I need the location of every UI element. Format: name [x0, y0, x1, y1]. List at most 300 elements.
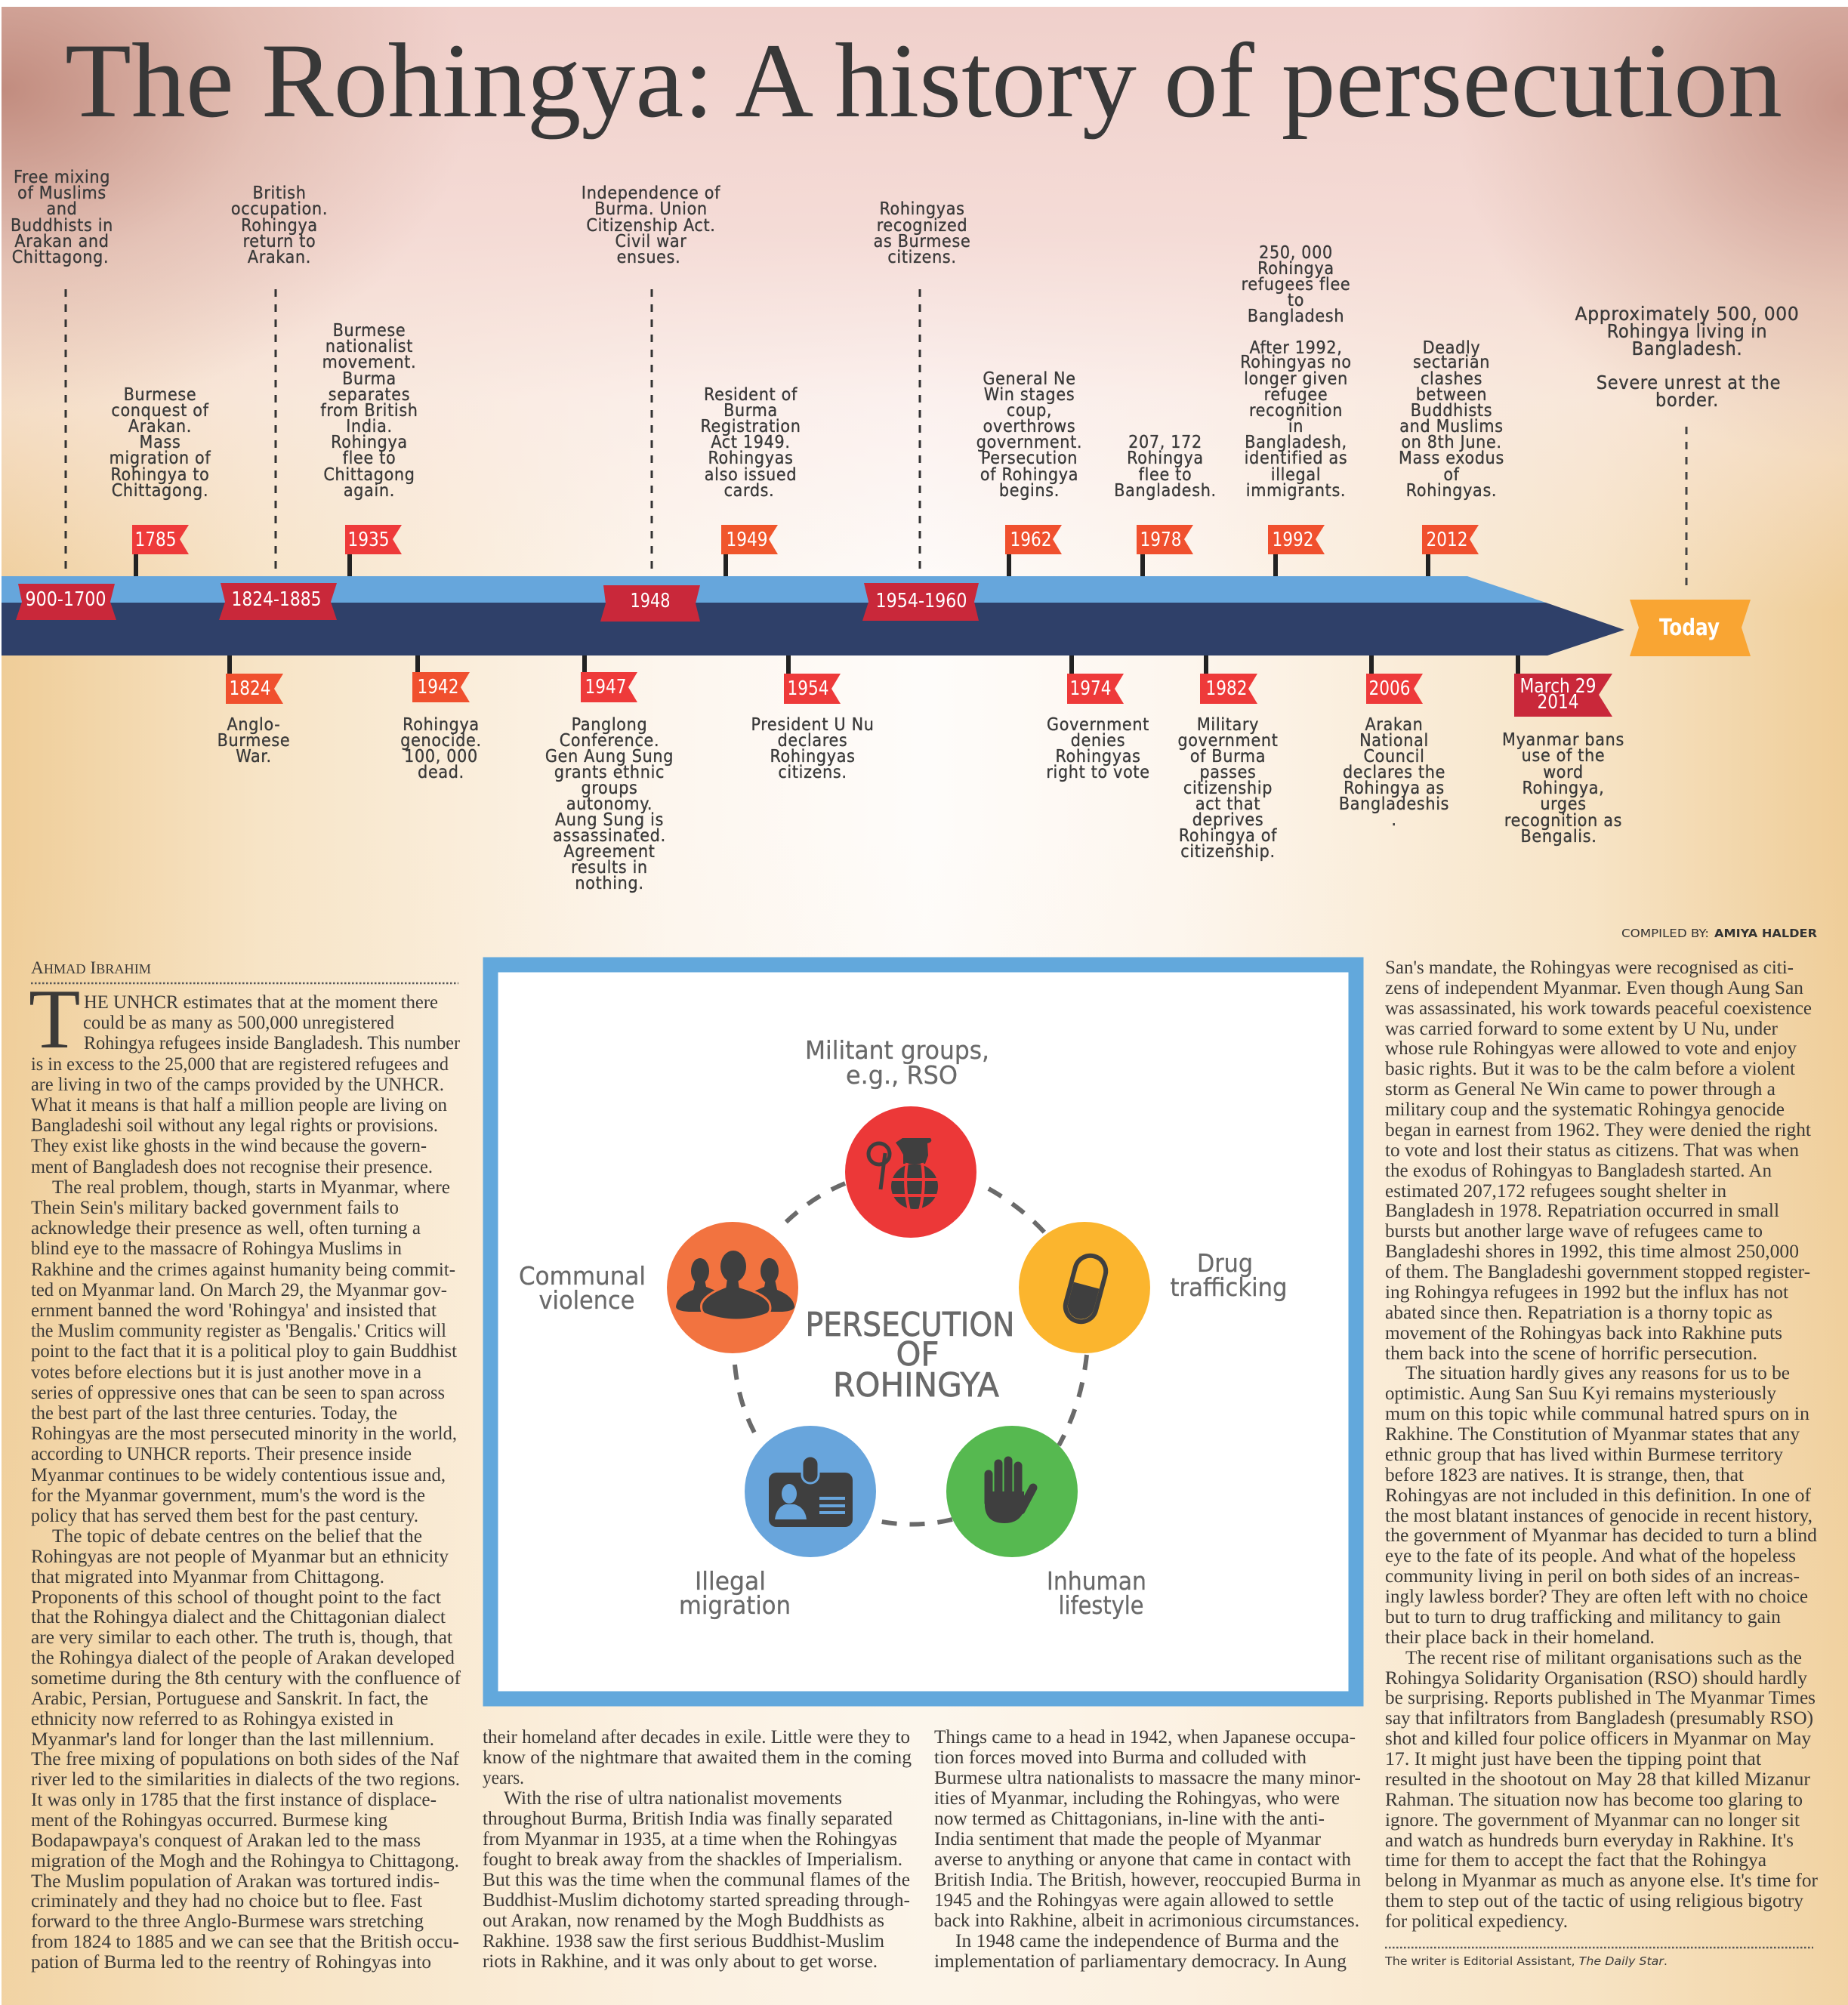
- diagram labels: trafficking: [1171, 1272, 1287, 1302]
- flag: 1992: Rohingyas no: [1240, 353, 1352, 372]
- flag: 1992: recognition: [1249, 401, 1343, 421]
- diagram labels: Militant groups,: [805, 1035, 989, 1065]
- credit: compiled by: AMIYA HALDER: [1714, 927, 1817, 940]
- flag: 1935: separates: [329, 385, 410, 405]
- credit: compiled by: COMPILED BY:: [1621, 927, 1709, 940]
- flag: 2012: 2012: [1426, 529, 1468, 551]
- article column 1: criminately and they had no choice but to flee. Fast: [31, 1891, 422, 1911]
- article column 1: Bangladeshi soil without any legal rights or provisions.: [31, 1115, 438, 1136]
- flag: 2006: [1339, 655, 1449, 830]
- article column 1: It was only in 1785 that the first instance of displace-: [31, 1790, 437, 1810]
- flag: 1935: Burma: [342, 369, 396, 389]
- timeline era: 900-1700: Arakan and: [14, 232, 110, 251]
- article column 1: Arabic, Persian, Portuguese and Sanskrit. In fact, the: [31, 1689, 428, 1709]
- flag: 1974: Government: [1047, 715, 1149, 735]
- flag: 1962: begins.: [999, 481, 1060, 501]
- article column 1: series of oppressive ones that can be seen to span across: [31, 1383, 445, 1403]
- flag: 1949: 1949: [727, 529, 767, 551]
- article column 1: Myanmar's land for longer than the last millennium.: [31, 1729, 434, 1750]
- flag: 1974: Rohingyas: [1055, 747, 1141, 767]
- flag: 1949: Act 1949.: [711, 433, 791, 452]
- flag: March 29 2014: 2014: [1538, 691, 1578, 714]
- icon: people: [667, 1222, 798, 1353]
- flag: 1962: Persecution: [981, 449, 1078, 468]
- flag: 1824: Burmese: [218, 731, 290, 751]
- flag: 1947: nothing.: [575, 874, 644, 893]
- timeline era: 1948: Independence of: [582, 184, 720, 203]
- article column 4: bursts but another large wave of refugees came to: [1385, 1221, 1763, 1242]
- flag: 1978: 1978: [1140, 529, 1181, 551]
- diagram labels: e.g., RSO: [846, 1060, 958, 1090]
- diagram labels: Inhuman: [1047, 1566, 1146, 1596]
- article column 4: their place back in their homeland.: [1385, 1627, 1655, 1648]
- article column 1: ernment banned the word 'Rohingya' and insisted that: [31, 1300, 437, 1321]
- timeline bar arrow: [2, 576, 1624, 655]
- article column 4: to vote and lost their status as citizens. That was when: [1385, 1140, 1799, 1161]
- article column 4: ingly lawless border? They are often left with no choice: [1385, 1587, 1808, 1607]
- article column 4: ing Rohingya refugees in 1992 but the influx has not: [1385, 1282, 1788, 1303]
- article column 1: Thein Sein's military backed government fails to: [31, 1198, 399, 1218]
- drop cap: T: [29, 973, 80, 1066]
- flag: 1935: from British: [320, 401, 418, 421]
- flag: 1982: citizenship.: [1180, 842, 1276, 862]
- flag: 2006: 2006: [1368, 677, 1411, 700]
- article column 4: ethnic group that has lived within Burmese territory: [1385, 1445, 1783, 1465]
- article column 4: zens of independent Myanmar. Even though Aung San: [1385, 978, 1804, 998]
- flag: 1785: Mass: [140, 433, 180, 452]
- article column 1: Rohingyas are not people of Myanmar but an ethnicity: [31, 1547, 449, 1567]
- flag: 2012: Deadly: [1423, 338, 1480, 358]
- article column 1: the Muslim community register as 'Bengalis.' Critics will: [31, 1321, 446, 1341]
- flag: 1942: dead.: [418, 763, 464, 782]
- article column 2: [483, 1727, 912, 1972]
- timeline era: 900-1700: of Muslims: [17, 184, 106, 203]
- article column 4: was carried forward to some extent by U Nu, under: [1385, 1019, 1779, 1039]
- flag: 1982: act that: [1195, 794, 1260, 814]
- flag: 1982: Rohingya of: [1179, 826, 1277, 846]
- timeline era: 1954-1960: recognized: [877, 216, 967, 236]
- flag: 1954: citizens.: [778, 763, 847, 782]
- flag: 1942: Rohingya: [403, 715, 480, 735]
- flag: March 29 2014: urges: [1540, 794, 1587, 814]
- flag: 2006: Bangladeshis: [1339, 794, 1449, 814]
- article column 4: San's mandate, the Rohingyas were recognised as citi-: [1385, 958, 1794, 978]
- flag: 2012: Rohingyas.: [1406, 481, 1497, 501]
- flag: 1785: migration of: [110, 449, 211, 468]
- flag: 1785: [110, 385, 211, 576]
- flag: 1947: results in: [571, 858, 648, 878]
- flag: 1824: 1824: [230, 677, 270, 700]
- article column 4: but to turn to drug trafficking and militancy to gain: [1385, 1607, 1782, 1627]
- article column 4: abated since then. Repatriation is a thorny topic as: [1385, 1303, 1772, 1323]
- diagram labels: [519, 1035, 1287, 1620]
- article column 4: ignore. The government of Myanmar can no longer sit: [1385, 1810, 1800, 1831]
- flag: 2012: sectarian: [1413, 353, 1490, 372]
- flag: 2006: National: [1359, 731, 1429, 751]
- flag: 1954: 1954: [787, 677, 829, 700]
- flag: March 29 2014: [1502, 655, 1624, 847]
- article column 1: Proponents of this school of thought point to the fact: [31, 1587, 441, 1608]
- article column 4: the most blatant instances of genocide in recent history,: [1385, 1506, 1813, 1526]
- article column 4: 17. It might just have been the tipping point that: [1385, 1749, 1761, 1769]
- timeline era: 1948: ensues.: [617, 248, 680, 267]
- diagram labels: lifestyle: [1059, 1590, 1143, 1620]
- flag: 1982: deprives: [1192, 810, 1263, 830]
- flag: 1962: overthrows: [983, 417, 1075, 436]
- today marker: Bangladesh.: [1632, 338, 1742, 359]
- flag: 2012: Buddhists: [1411, 401, 1492, 421]
- article column 1: pation of Burma led to the reentry of Rohingyas into: [31, 1952, 431, 1973]
- article column 3: ities of Myanmar, including the Rohingyas, who were: [934, 1788, 1340, 1809]
- flag: March 29 2014: recognition as: [1504, 811, 1622, 831]
- article column 1: Rakhine and the crimes against humanity being commit-: [31, 1260, 455, 1280]
- flag: 1962: [976, 369, 1082, 576]
- article column 4: The situation hardly gives any reasons for us to be: [1405, 1363, 1790, 1383]
- flag: 1785: Rohingya to: [110, 465, 210, 485]
- diagram centre heading: ROHINGYA: [833, 1366, 999, 1405]
- diagram labels: Drug: [1197, 1248, 1253, 1278]
- panel: persecution diagram: [491, 965, 1356, 1699]
- article column 2: years.: [483, 1768, 524, 1788]
- flag: 1949: [700, 385, 801, 576]
- flag: 1962: coup,: [1007, 401, 1052, 421]
- flag: 1974: right to vote: [1046, 763, 1150, 782]
- flag: 1942: [400, 655, 482, 782]
- article column 1: The real problem, though, starts in Myanmar, where: [52, 1177, 450, 1198]
- flag: 1978: flee to: [1139, 465, 1192, 485]
- flag: 1935: India.: [346, 417, 393, 436]
- flag: 1947: groups: [581, 779, 638, 798]
- article column 1: HE UNHCR estimates that at the moment there: [84, 992, 438, 1013]
- article column 4: belong in Myanmar as much as anyone else. It's time for: [1385, 1871, 1819, 1891]
- flag: 1949: cards.: [724, 481, 774, 501]
- article column 2: With the rise of ultra nationalist movements: [504, 1788, 842, 1809]
- flag: 1942: 100, 000: [404, 747, 478, 767]
- flag: 2012: [1399, 338, 1504, 576]
- article column 4: began in earnest from 1962. They were denied the right: [1385, 1120, 1811, 1140]
- article column 4: Bangladesh in 1978. Repatriation occurred in small: [1385, 1201, 1779, 1221]
- flag: 1962: Win stages: [984, 385, 1075, 405]
- diagram centre heading: OF: [896, 1335, 939, 1374]
- article column 4: and watch as hundreds burn everyday in Rakhine. It's: [1385, 1831, 1794, 1851]
- flag: 1935: Chittagong: [323, 465, 415, 485]
- article column 4: storm as General Ne Win came to power through a: [1385, 1079, 1775, 1100]
- article column 3: averse to anything or anyone that came in contact with: [934, 1849, 1351, 1870]
- timeline era: 900-1700: [11, 168, 116, 620]
- diagram labels: Illegal: [695, 1566, 766, 1596]
- flag: 1785: Chittagong.: [112, 481, 208, 501]
- flag: 1982: [1177, 655, 1279, 862]
- article column 4: Rahman. The situation now has become too glaring to: [1385, 1790, 1803, 1810]
- article column 3: [934, 1727, 1361, 1972]
- article column 2: from Myanmar in 1935, at a time when the Rohingyas: [483, 1829, 897, 1849]
- timeline era: 900-1700: and: [46, 199, 78, 219]
- article column 1: the best part of the last three centuries. Today, the: [31, 1403, 397, 1424]
- article column 1: They exist like ghosts in the wind because the govern-: [31, 1136, 427, 1156]
- article column 1: from 1824 to 1885 and we can see that the British occu-: [31, 1932, 459, 1952]
- article column 1: are living in two of the camps provided by the UNHCR.: [31, 1075, 444, 1095]
- flag: 1974: denies: [1071, 731, 1125, 751]
- flag: 1992: refugees flee: [1242, 275, 1350, 295]
- timeline era: 1824-1885: Arakan.: [248, 248, 311, 267]
- flag: 2012: between: [1416, 385, 1487, 405]
- today marker: Severe unrest at the: [1597, 372, 1781, 393]
- article column 3: tion forces moved into Burma and colluded with: [934, 1747, 1307, 1768]
- flag: 1982: passes: [1199, 763, 1257, 782]
- flag: 1949: Resident of: [704, 385, 798, 405]
- flag: 1982: 1982: [1205, 677, 1248, 700]
- flag: 1978: Bangladesh.: [1114, 481, 1217, 501]
- flag: 1954: Rohingyas: [770, 747, 856, 767]
- article column 1: that migrated into Myanmar from Chittagong.: [31, 1567, 384, 1587]
- icon: grenade: [845, 1106, 976, 1238]
- flag: 1947: [545, 655, 674, 893]
- article column 4: community living in peril on both sides of an increas-: [1385, 1566, 1800, 1587]
- flag: 1935: flee to: [343, 449, 396, 468]
- article column 1: acknowledge their presence as well, often turning a: [31, 1218, 421, 1238]
- flag: 2006: Arakan: [1365, 715, 1423, 735]
- article column 4: military coup and the systematic Rohingya genocide: [1385, 1100, 1785, 1120]
- timeline era: 1824-1885: return to: [243, 232, 316, 251]
- article column 1: migration of the Mogh and the Rohingya to Chittagong.: [31, 1851, 459, 1871]
- flag: 2006: .: [1391, 810, 1397, 830]
- article column 2: But this was the time when the communal flames of the: [483, 1870, 910, 1890]
- article column 1: point to the fact that it is a political ploy to gain Buddhist: [31, 1341, 457, 1362]
- flag: 1947: Panglong: [572, 715, 647, 735]
- article column 4: Rakhine. The Constitution of Myanmar states that any: [1385, 1424, 1800, 1445]
- flag: 1992: immigrants.: [1246, 481, 1346, 501]
- flag: 1947: Aung Sung is: [555, 810, 664, 830]
- article column 4: whose rule Rohingyas were allowed to vote and enjoy: [1385, 1038, 1797, 1059]
- flag: 1935: Rohingya: [331, 433, 408, 452]
- article column 2: know of the nightmare that awaited them in the coming: [483, 1747, 912, 1768]
- article column 1: What it means is that half a million people are living on: [31, 1095, 447, 1115]
- flag: 2012: and Muslims: [1399, 417, 1504, 436]
- article column 4: them back into the scene of horrific persecution.: [1385, 1343, 1757, 1364]
- article column 4: optimistic. Aung San Suu Kyi remains mysteriously: [1385, 1383, 1776, 1404]
- article column 4: the exodus of Rohingyas to Bangladesh started. An: [1385, 1161, 1772, 1181]
- article column 1: river led to the similarities in dialects of the two regions.: [31, 1769, 460, 1790]
- timeline era: 1824-1885: 1824-1885: [231, 588, 322, 611]
- flag: 1935: again.: [344, 481, 395, 501]
- article column 1: The free mixing of populations on both sides of the Naf: [31, 1749, 460, 1769]
- article column 4: shot and killed four police officers in Myanmar on May: [1385, 1729, 1812, 1749]
- title: The Rohingya: A history of persecution: [65, 22, 1782, 140]
- article column 1: Rohingya refugees inside Bangladesh. This number: [84, 1033, 461, 1053]
- flag: 1974: 1974: [1069, 677, 1112, 700]
- article column 3: 1945 and the Rohingyas were again allowed to settle: [934, 1890, 1334, 1911]
- flag: 2012: clashes: [1421, 369, 1482, 389]
- byline: AHMAD IBRAHIM: [31, 958, 151, 977]
- flag: 1982: government: [1177, 731, 1279, 751]
- flag: 1954: declares: [778, 731, 847, 751]
- flag: 1992: longer given: [1244, 369, 1348, 389]
- flag: 1978: Rohingya: [1127, 449, 1204, 468]
- article column 1: Myanmar continues to be widely contentious issue and,: [31, 1465, 446, 1485]
- today marker: Approximately 500, 000: [1575, 303, 1799, 325]
- flag: 1942: genocide.: [400, 731, 482, 751]
- flag: 1992: in: [1288, 417, 1303, 436]
- flag: 1962: of Rohingya: [980, 465, 1078, 485]
- article column 1: blind eye to the massacre of Rohingya Muslims in: [31, 1238, 402, 1259]
- article column 3: Things came to a head in 1942, when Japanese occupa-: [934, 1727, 1356, 1747]
- flag: 1947: autonomy.: [566, 794, 653, 814]
- flag: 1992: Rohingya: [1257, 259, 1334, 279]
- flag: 1992: illegal: [1271, 465, 1321, 485]
- flag: 2006: declares the: [1343, 763, 1445, 782]
- article column 4: eye to the fate of its people. And what of the hopeless: [1385, 1546, 1796, 1566]
- timeline era: 1954-1960: Rohingyas: [879, 199, 965, 219]
- icon: id card: [745, 1426, 876, 1557]
- article column 1: [29, 973, 461, 1973]
- flag: 1954: [751, 655, 875, 782]
- timeline era: 1948: Burma. Union: [594, 199, 708, 219]
- flag: 1949: also issued: [705, 465, 797, 485]
- timeline era: 900-1700: Buddhists in: [11, 216, 113, 236]
- flag: March 29 2014: use of the: [1522, 746, 1605, 766]
- article column 4: time for them to accept the fact that the Rohingya: [1385, 1850, 1766, 1871]
- flag: 1947: Conference.: [560, 731, 659, 751]
- flag: 1992: [1240, 243, 1352, 576]
- flag: 1947: 1947: [585, 676, 627, 699]
- flag: 1978: 207, 172: [1128, 433, 1202, 452]
- timeline era: 1824-1885: occupation.: [231, 199, 328, 219]
- timeline era: 900-1700: 900-1700: [26, 588, 106, 611]
- timeline era: 1954-1960: [862, 199, 979, 621]
- flag: 1962: government.: [976, 433, 1082, 452]
- article column 2: Buddhist-Muslim dichotomy started spreading through-: [483, 1890, 910, 1911]
- today marker: border.: [1655, 389, 1719, 411]
- flag: March 29 2014: Bengalis.: [1520, 827, 1597, 847]
- flag: 1949: Rohingyas: [708, 449, 794, 468]
- today marker: Today: [1659, 615, 1720, 641]
- flag: 1978: [1114, 433, 1217, 576]
- article column 1: votes before elections but it is just another move in a: [31, 1362, 421, 1383]
- article column 4: [1385, 958, 1819, 1932]
- flag: 1954: President U Nu: [751, 715, 875, 735]
- diagram centre heading: [805, 1306, 1015, 1405]
- article column 2: throughout Burma, British India was finally separated: [483, 1809, 893, 1829]
- article column 4: resulted in the shootout on May 28 that killed Mizanur: [1385, 1769, 1811, 1790]
- flag: March 29 2014: Rohingya,: [1523, 779, 1604, 798]
- flag: 1824: Anglo-: [227, 715, 280, 735]
- flag: 1785: Arakan.: [128, 417, 192, 436]
- article column 1: could be as many as 500,000 unregistered: [83, 1013, 394, 1033]
- flag: 1824: [218, 655, 290, 767]
- flag: 1992: identified as: [1245, 449, 1347, 468]
- credit: compiled by: [1621, 927, 1817, 940]
- flag: March 29 2014: word: [1543, 763, 1584, 782]
- article column 1: sometime during the 8th century with the confluence of: [31, 1668, 461, 1689]
- article column 4: of them. The Bangladeshi government stopped register-: [1385, 1262, 1810, 1282]
- article column 4: Rohingya Solidarity Organisation (RSO) should hardly: [1385, 1668, 1807, 1689]
- article column 4: estimated 207,172 refugees sought shelter in: [1385, 1181, 1726, 1201]
- diagram labels: Communal: [519, 1261, 646, 1291]
- timeline era: 1824-1885: Rohingya: [241, 216, 318, 236]
- article column 3: now termed as Chittagonians, in-line with the anti-: [934, 1809, 1325, 1829]
- flag: 1935: 1935: [347, 529, 390, 551]
- article column 4: mum on this topic while communal hatred spurs on in: [1385, 1404, 1810, 1424]
- article column 4: The recent rise of militant organisations such as the: [1405, 1648, 1802, 1668]
- article column 2: riots in Rakhine, and it was only about to get worse.: [483, 1951, 878, 1972]
- flag: 1785: 1785: [134, 529, 177, 551]
- flag: 2006: Council: [1363, 747, 1425, 767]
- flag: 2012: Mass exodus: [1399, 449, 1504, 468]
- flag: 1947: Agreement: [563, 842, 656, 862]
- article column 3: India sentiment that made the people of Myanmar: [934, 1829, 1322, 1849]
- today marker: Rohingya living in: [1607, 320, 1767, 342]
- flag: 1935: nationalist: [325, 337, 413, 356]
- flag: 1982: citizenship: [1183, 779, 1273, 798]
- article column 4: the government of Myanmar has decided to turn a blind: [1385, 1525, 1818, 1546]
- article column 1: ment of the Rohingyas occurred. Burmese king: [31, 1810, 387, 1831]
- timeline era: 900-1700: Free mixing: [14, 168, 110, 187]
- flag: 1992: 1992: [1272, 529, 1314, 551]
- article column 1: Rohingyas are the most persecuted minority in the world,: [31, 1424, 457, 1444]
- flag: 1785: conquest of: [111, 401, 209, 421]
- article column 4: movement of the Rohingyas back into Rakhine puts: [1385, 1323, 1782, 1343]
- flag: 1824: War.: [236, 747, 272, 767]
- article column 1: policy that has served them best for the past century.: [31, 1506, 418, 1526]
- article column 1: according to UNHCR reports. Their presence inside: [31, 1444, 412, 1464]
- article column 4: Bangladeshi shores in 1992, this time almost 250,000: [1385, 1242, 1799, 1262]
- timeline era: 1948: Citizenship Act.: [586, 216, 716, 236]
- flag: 2006: Rohingya as: [1344, 779, 1445, 798]
- timeline era: 1948: Civil war: [615, 232, 686, 251]
- article column 1: forward to the three Anglo-Burmese wars stretching: [31, 1911, 424, 1932]
- article column 1: that the Rohingya dialect and the Chittagonian dialect: [31, 1607, 446, 1627]
- article column 1: ethnicity now referred to as Rohingya existed in: [31, 1709, 393, 1729]
- icon: pill: [1019, 1222, 1150, 1353]
- article column 1: for the Myanmar government, mum's the word is the: [31, 1485, 425, 1506]
- flag: 1982: Military: [1197, 715, 1259, 735]
- flag: 1935: [320, 321, 418, 576]
- flag: 1992: to: [1288, 291, 1304, 310]
- article column 4: them to step out of the tactic of using religious bigotry: [1385, 1891, 1803, 1911]
- flag: 1935: movement.: [322, 353, 416, 372]
- article column 3: British India. The British, however, reoccupied Burma in: [934, 1870, 1361, 1890]
- timeline era: 1948: [582, 184, 720, 622]
- timeline era: 1954-1960: citizens.: [887, 248, 957, 267]
- flag: 1982: of Burma: [1190, 747, 1266, 767]
- article column 1: ted on Myanmar land. On March 29, the Myanmar gov-: [31, 1280, 447, 1300]
- flag: 1992: Bangladesh,: [1245, 433, 1347, 452]
- article column 1: Bodapawpaya's conquest of Arakan led to the mass: [31, 1831, 421, 1851]
- today marker: [1575, 303, 1799, 656]
- article column 3: Burmese ultra nationalists to massacre the many minor-: [934, 1768, 1361, 1788]
- flag: 1962: General Ne: [983, 369, 1076, 389]
- article column 1: are very similar to each other. The truth is, though, that: [31, 1627, 452, 1648]
- flag: 1949: Burma: [723, 401, 778, 421]
- flag: 1947: Gen Aung Sung: [545, 747, 674, 767]
- article column 2: Rakhine. 1938 saw the first serious Buddhist-Muslim: [483, 1931, 885, 1951]
- flag: 1992: refugee: [1264, 385, 1328, 405]
- flag: 1992: 250, 000: [1259, 243, 1333, 263]
- article column 1: ment of Bangladesh does not recognise their presence.: [31, 1157, 433, 1177]
- article column 4: before 1823 are natives. It is strange, then, that: [1385, 1465, 1744, 1485]
- diagram labels: violence: [539, 1285, 634, 1315]
- flag: 1992: After 1992,: [1249, 338, 1343, 358]
- timeline era: 1824-1885: [219, 184, 337, 620]
- article column 2: out Arakan, now renamed by the Mogh Buddhists as: [483, 1911, 884, 1931]
- flag: 1785: Burmese: [124, 385, 196, 405]
- article column 2: fought to break away from the shackles of Imperialism.: [483, 1849, 902, 1870]
- article column 3: back into Rakhine, albeit in acrimonious circumstances.: [934, 1911, 1359, 1931]
- flag: 2012: of: [1443, 465, 1460, 485]
- flag: 1949: Registration: [700, 417, 801, 436]
- timeline era: 1954-1960: 1954-1960: [876, 590, 967, 612]
- article column 3: implementation of parliamentary democracy. In Aung: [934, 1951, 1347, 1972]
